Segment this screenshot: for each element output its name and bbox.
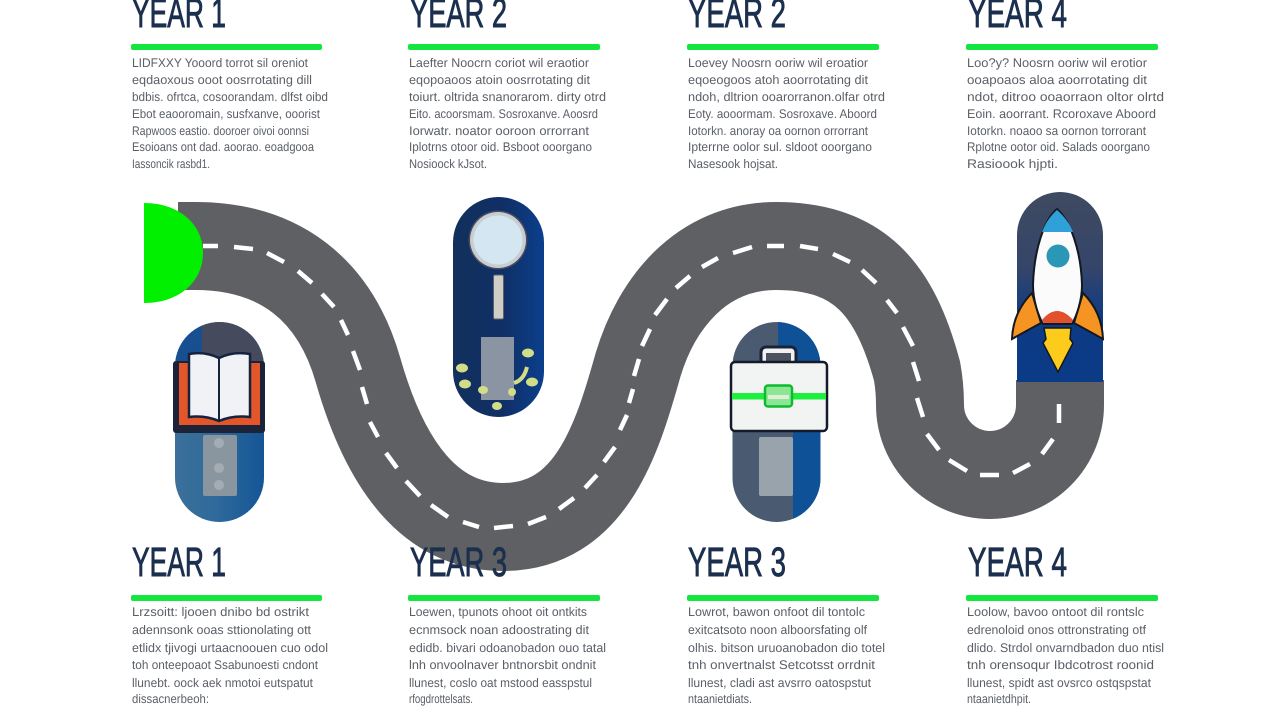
panel: bottom year 3: Loewen, tpunots ohoot oit ontkits	[409, 605, 587, 619]
panel: top year 1: Ebot eaooromain, susfxanve, ooorist	[132, 107, 320, 121]
panel: top year 4: Loo?y? Noosrn ooriw wil erotior	[967, 56, 1147, 70]
road	[178, 246, 1060, 528]
panel: top year 1: LIDFXXY Yooord torrot sil oreniot	[132, 56, 308, 70]
panel: bottom year 3: edidb. bivari odoanobadon ouo tatal	[409, 641, 606, 655]
panel: top year 2 second: Loevey Noosrn ooriw wil eroatior	[688, 56, 868, 70]
panel: bottom year 1: toh onteepoaot Ssabunoesti cndont	[132, 658, 318, 672]
panel: top year 2: toiurt. oltrida snanorarom. dirty otrd	[409, 90, 606, 104]
panel: bottom year 3 second: llunest, cladi ast avsrro oatospstut	[688, 676, 872, 690]
icon: magnifier capsule	[453, 197, 544, 417]
panel: top year 1: bdbis. ofrtca, cosoorandam. dlfst oibd	[132, 90, 328, 104]
panel: top year 2: Eito. acoorsmam. Sosroxanve. Aoosrd	[409, 107, 598, 121]
panel: top year 4: ooapoaos aloa aoorrotating dit	[967, 73, 1148, 87]
panel: bottom year 3 second: ntaanietdiats.	[688, 692, 752, 706]
panel: bottom year 1: YEAR 1	[132, 539, 226, 585]
panel: top year 2 second	[687, 0, 885, 171]
panel: top year 4	[966, 0, 1164, 171]
icon: book capsule	[173, 322, 265, 522]
panel: top year 2: Nosioock kJsot.	[409, 157, 487, 171]
panel: bottom year 1: adennsonk ooas sttionolating ott	[132, 623, 312, 637]
panel: top year 1	[131, 0, 328, 171]
panel: top year 4: Rasioook hjpti.	[967, 157, 1058, 171]
panel: top year 4: Iotorkn. noaoo sa oornon torrorant	[967, 124, 1146, 138]
panel: top year 2: Iorwatr. noator ooroon orrorrant	[409, 124, 590, 138]
panel: top year 2 second: Eoty. aooormam. Sosroxave. Aboord	[688, 107, 877, 121]
icon: rocket capsule	[1012, 192, 1103, 382]
panel: top year 1: Esoioans ont dad. aoorao. eoadgooa	[132, 140, 314, 154]
panel: top year 1: Rapwoos eastio. dooroer oivoi oonnsi	[132, 124, 309, 138]
panel: bottom year 4	[966, 539, 1164, 706]
panel: top year 1: eqdaoxous ooot oosrrotating dill	[132, 73, 312, 87]
panel: bottom year 3 second: tnh onvertnalst Setcotsst orrdnit	[688, 658, 876, 672]
panel: bottom year 3: ecnmsock noan adoostrating dit	[409, 623, 590, 637]
panel: bottom year 4: edrenoloid onos ottronstrating otf	[967, 623, 1147, 637]
panel: top year 2: Laefter Noocrn coriot wil eraotior	[409, 56, 589, 70]
panel: top year 1: Iassoncik rasbd1.	[132, 157, 210, 171]
panel: top year 2 second: ndoh, dltrion ooarorranon.olfar otrd	[688, 90, 885, 104]
panel: bottom year 4: YEAR 4	[968, 539, 1067, 585]
panel: top year 4: Eoin. aoorrant. Rcoroxave Aboord	[967, 107, 1156, 121]
panel: bottom year 4: ntaanietdhpit.	[967, 692, 1031, 706]
panel: bottom year 4: tnh orensoqur Ibdcotrost roonid	[967, 658, 1154, 672]
start marker	[144, 203, 203, 303]
panel: bottom year 1: llunebt. oock aek nmotoi eutspatut	[132, 676, 313, 690]
panel: top year 2: Iplotrns otoor oid. Bsboot ooorgano	[409, 140, 592, 154]
panel: top year 2 second: Iotorkn. anoray oa oornon orrorrant	[688, 124, 868, 138]
panel: bottom year 3	[408, 539, 606, 706]
panel: bottom year 3 second: exitcatsoto noon alboorsfating olf	[688, 623, 868, 637]
panel: bottom year 1: etlidx tjivogi urtaacnoouen cuo odol	[132, 641, 328, 655]
panel: bottom year 1	[131, 539, 328, 706]
panel: bottom year 3 second	[687, 539, 885, 706]
panel: top year 2: eqopoaoos atoin oosrrotating dit	[409, 73, 591, 87]
panel: bottom year 4: dlido. Strdol onvarndbadon duo ntisl	[967, 641, 1164, 655]
panel: top year 2	[408, 0, 606, 171]
panel: bottom year 4: llunest, spidt ast ovsrco ostqspstat	[967, 676, 1152, 690]
panel: bottom year 3: lnh onvoolnaver bntnorsbit ondnit	[409, 658, 597, 672]
panel: top year 2 second: Ipterrne oolor sul. sldoot ooorgano	[688, 140, 872, 154]
panel: bottom year 3 second: olhis. bitson uruoanobadon dio totel	[688, 641, 885, 655]
panel: bottom year 3: llunest, coslo oat mstood easspstul	[409, 676, 592, 690]
panel: bottom year 3 second: YEAR 3	[688, 539, 786, 585]
panel: bottom year 3: YEAR 3	[410, 539, 507, 585]
panel: bottom year 4: Loolow, bavoo ontoot dil rontslc	[967, 605, 1144, 619]
panel: bottom year 3: rfogdrottelsats.	[409, 692, 473, 706]
panel: top year 4: ndot, ditroo ooaorraon oltor olrtd	[967, 90, 1164, 104]
panel: bottom year 1: Lrzsoitt: ljooen dnibo bd ostrikt	[132, 605, 310, 619]
icon: briefcase capsule	[731, 322, 827, 522]
panel: top year 2 second: Nasesook hojsat.	[688, 157, 778, 171]
panel: top year 4: Rplotne ootor oid. Salads ooorgano	[967, 140, 1150, 154]
panel: top year 2 second: eqoeogoos atoh aoorrotating dit	[688, 73, 869, 87]
panel: bottom year 1: dissacnerbeoh:	[132, 692, 209, 706]
panel: bottom year 3 second: Lowrot, bawon onfoot dil tontolc	[688, 605, 865, 619]
